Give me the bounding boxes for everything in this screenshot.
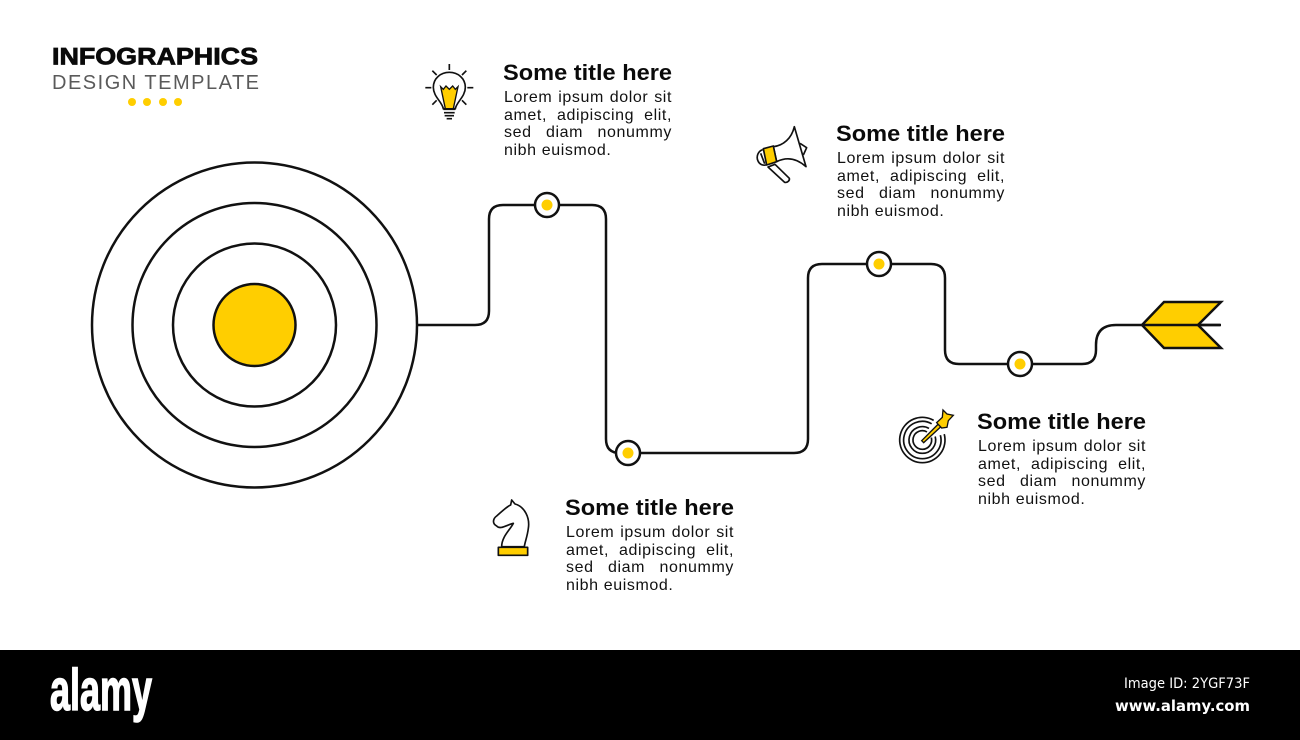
- text block: step 4: Some title here: [978, 409, 1146, 434]
- text block: step 2: Lorem ipsum dolor sit amet, adipiscing elit, sed diam nonummy nibh euismod.: [837, 150, 1005, 220]
- icon: megaphone: [757, 127, 807, 182]
- text block: step 2: Some title here: [837, 121, 1005, 146]
- text block: step 4: Lorem ipsum dolor sit amet, adipiscing elit, sed diam nonummy nibh euismod.: [978, 438, 1146, 508]
- footer bar: alamy: [50, 658, 152, 723]
- text block: step 1: Some title here: [504, 60, 672, 85]
- icon: light bulb: [425, 64, 473, 119]
- icon: target with dart: [900, 410, 953, 463]
- text block: step 3: Some title here: [566, 495, 734, 520]
- arrow fletching end: [1142, 302, 1221, 348]
- concentric target circles: [92, 162, 417, 488]
- path node 1: [535, 193, 559, 217]
- footer bar: www.alamy.com: [1115, 697, 1250, 715]
- winding path line: [417, 205, 1220, 453]
- text block: step 1: Lorem ipsum dolor sit amet, adipiscing elit, sed diam nonummy nibh euismod.: [504, 89, 672, 159]
- path node 4: [1008, 352, 1032, 376]
- header: infographics design template: INFOGRAPHICS: [52, 44, 258, 70]
- text block: step 3: Lorem ipsum dolor sit amet, adipiscing elit, sed diam nonummy nibh euismod.: [566, 524, 734, 594]
- footer bar: Image ID: 2YGF73F: [1124, 676, 1250, 692]
- path node 3: [867, 252, 891, 276]
- header: infographics design template: DESIGN TEMPLATE: [52, 72, 259, 94]
- footer bar: [0, 650, 1300, 740]
- path node 2: [616, 441, 640, 465]
- header: infographics design template: [52, 44, 259, 106]
- icon: chess knight: [494, 500, 529, 555]
